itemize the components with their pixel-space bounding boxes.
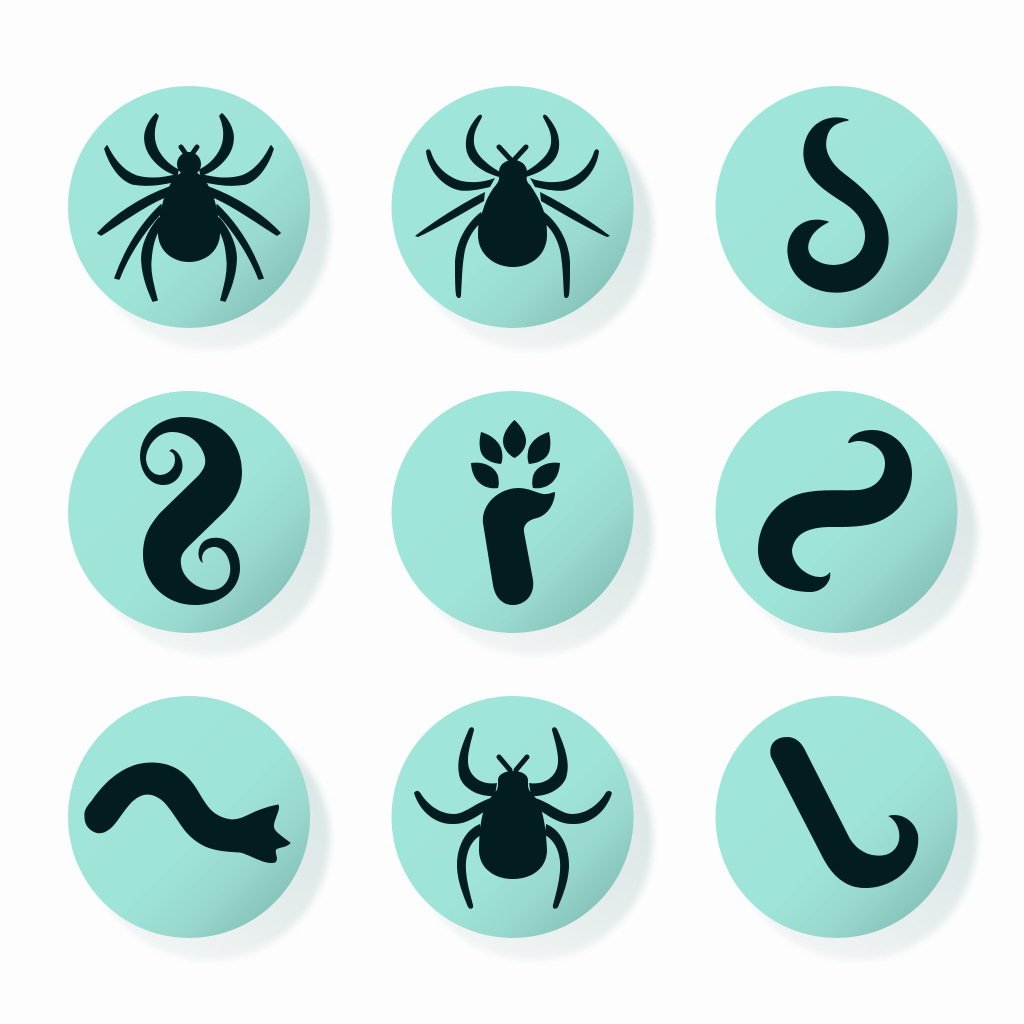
panel: curled worm S <box>716 86 977 350</box>
panel: wavy fluke <box>68 696 330 960</box>
icon: tick 3 <box>414 727 612 909</box>
panel: tick with six legs <box>392 86 653 350</box>
panel: tick with eight long legs <box>68 86 330 350</box>
panel: double spiral worm <box>68 391 330 655</box>
icon: hooked larva <box>770 737 918 888</box>
panel: hooked larva <box>716 696 977 960</box>
icon: double spiral worm <box>140 417 242 605</box>
icon: foot with toes <box>471 420 560 605</box>
icon: hook worm <box>758 430 912 592</box>
panel: hook worm <box>716 391 977 655</box>
panel: round tick <box>392 696 653 960</box>
icon: tick 1 <box>98 114 280 301</box>
panel: foot with leaf toes <box>392 391 653 655</box>
icon: wavy fluke <box>85 763 290 863</box>
icon: worm S <box>788 118 888 292</box>
icon: tick 2 <box>415 115 610 298</box>
